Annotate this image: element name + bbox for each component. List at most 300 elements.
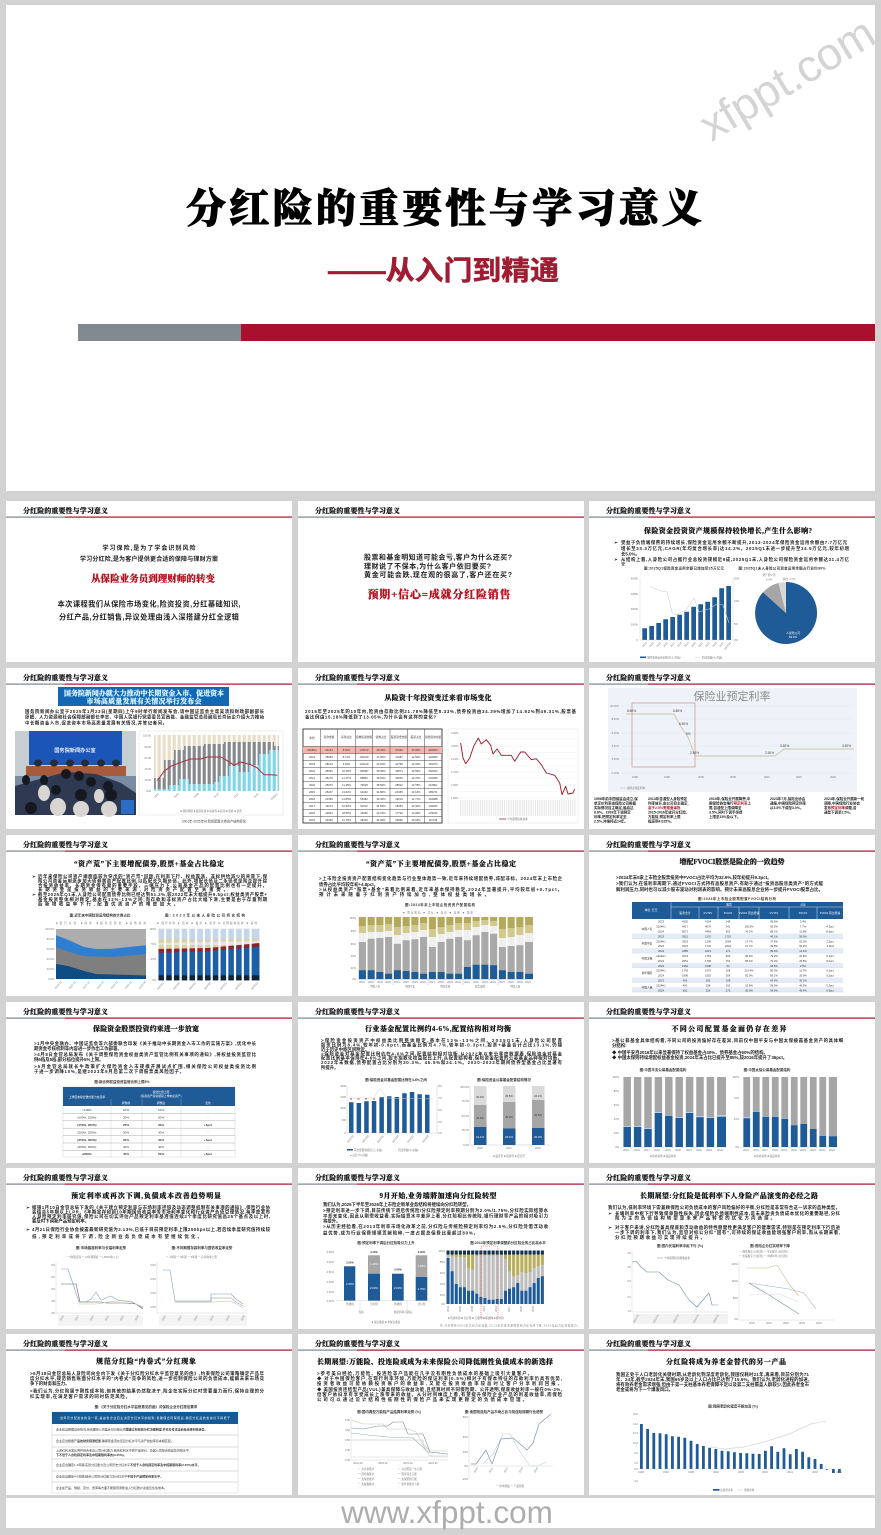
stacked bars: CPIC: 2016 [753,1148,759,1152]
line chart: bond yield: 3.90% [451,731,459,735]
data table: 24363 [325,797,333,801]
line chart: benchmark rates: 2017 [74,1314,80,1322]
bullets: 据银1月10日金管总局下发的《关于建立预定利率与市场利率挂钩及动态调整机制有关事项的通知》,保险行业协 [32,1204,271,1211]
FVOCI table: 2024H1 [656,939,666,943]
stacked bar and line chart: 2005 [173,791,180,799]
line chart: insurance predetermined interest rate [608,688,857,792]
panel: slide 2 learning purpose [6,501,292,662]
data table: 12.30% [411,804,421,808]
line chart: long-term rate: 3.0 [627,1265,632,1269]
data table: 178472 [360,748,369,752]
bar chart: funds balance: 2022 [704,641,711,648]
regulation table: 30% [158,1123,164,1127]
legend: ■ 固定收益 ■ 非标 ■ 权益 ■ 其他 ■ 现金 [403,910,473,914]
body text: 例6档及5档,部分档位提升5%上限。 [34,1056,104,1063]
body text [321,1037,563,1071]
FVOCI table: 2023 [658,920,664,924]
stacked bars: product mix: 注:分红险在2002年之前占比较低,2013年后受普通险影响占比有所下降,2024年起占比持续提升。 [440,1324,580,1328]
stacked bars: Ping An: 40% [614,1117,620,1121]
bar chart: fund allocation: 1800 [340,1084,347,1088]
timeline notes: 2013年普通型人身险预定 [648,796,688,801]
line chart: benchmark rates: 2021 [104,1314,110,1322]
body text: >2024年末5家上市险企股票投资中FVOCI占比平均为32.9%,较年初提升9.3pct。 [616,874,772,881]
data table: 262044 [429,769,438,773]
data table: 债券投资金额 [356,735,372,739]
FVOCI table: 148 [726,920,731,924]
stacked bars: CPIC: 2021 [800,1148,806,1152]
requirements table: 企业应当确定4-5年期,结合公司的分红能力及分红水平不低于产品预定利率水平。 [56,1474,163,1478]
regulation table: [300%, 350%) [78,1145,96,1149]
legends [66,1255,217,1259]
stacked bars: product mix: 2017 [507,1305,511,1312]
questions: 理财说了不保本,为什么客户依旧要买? [364,562,491,570]
line chart: universal products: 2.00 [345,1458,351,1462]
stacked bars: fund structure: ■ 股票型 ■ 债券型 ■ 混合型 [493,1154,525,1158]
regulation table: [100%, 150%) [78,1116,96,1120]
body text: 2022年末数据,债券配置占比分别为30.3%、45.5%和24.1%。2020-2022年期间债券型基金占比显著有 [321,1059,563,1066]
data table: 2019 [309,790,315,794]
line chart: US VUL share [462,1414,553,1488]
pie chart [755,573,817,644]
regulation table: +5pct [204,1138,212,1142]
FVOCI table: 11.9% [799,930,807,934]
chart titles: 图:国内长端利率中枢下行 (%) [657,1243,703,1248]
FVOCI table: 1806 [682,974,688,978]
requirements table [52,1412,238,1493]
stacked bars: holdings: 2023Q3 [172,981,181,991]
bullets: ➢ [614,540,618,545]
FVOCI table: 2921 [682,934,688,938]
data table: 34.59% [376,804,386,808]
body text: 公司可以通过设计结构性低刚性的保险产品来实现更稳定的负债成本管理。 [317,1396,527,1403]
stacked bars: Ping An: 60% [614,1103,620,1107]
header: 分红险的重要性与学习意义 [23,1173,108,1182]
regulation table: 50% [158,1152,164,1156]
data table: 2020 [309,783,315,787]
stacked bars: product mix: 2023 [531,1305,535,1312]
chart title: 图:2024年末上市险企投资资产配置结构 [405,902,476,907]
stacked bars: product mix: 2014 [494,1305,498,1312]
line chart: universal products: 2021-01 [353,1461,363,1465]
stacked bar and line chart: 2013 [213,791,220,799]
line chart: deposit rates: 4.0% [150,1291,157,1295]
questions [364,552,512,579]
data table: 34.39% [376,818,386,822]
stacked bar and line chart: 100.00 [143,734,152,738]
bar chart: rates: 1.40% [370,1262,378,1266]
FVOCI table: 1743 [682,969,688,973]
FVOCI table: 3.5% [800,964,807,968]
bar chart: rates: 3.40% [370,1250,378,1254]
area chart: asset mix: 0.0% [48,977,55,981]
body text: ◆ 美国投资连结型产品(VUL)兼具保障与收益功能,且结算时间不同保险期、公开透明,保底收益利率一般在0%-2%, [317,1386,562,1393]
bar chart: funds balance: 2020 [690,641,697,648]
area chart: asset mix: 100.0% [45,927,55,931]
bar chart: funds balance: 0 [637,638,639,642]
data table: 11.27% [342,776,352,780]
stacked bars: fund structure: 30.3% [534,1135,542,1139]
bullets [614,539,850,568]
line chart: realised dividend rate: 2024 [816,1321,822,1325]
bar chart: fund allocation: 600 [342,1118,347,1122]
stacked bars: fund structure: 24.1% [534,1094,542,1098]
line chart: insurance predetermined interest rate: 3.50% [780,744,789,748]
FVOCI table: 40.5% [799,983,807,987]
body text [30,1370,265,1400]
bar chart: rates: 2.50% [346,1282,354,1286]
stacked bars: CPIC: 2015 [743,1148,749,1152]
panel: slide 3 why buy [298,501,584,662]
data table: 133910 [429,811,438,815]
bar chart: funds balance: 2023 [711,641,718,648]
table title: 图:新比例权益投资监管比例上限5% [94,1079,150,1084]
panel: slide 8 asset shortage bonds [6,835,292,996]
header: 分红险的重要性与学习意义 [23,840,108,849]
bar and line chart: aging: 10.0 [633,1441,639,1445]
regulation table: 40% [123,1145,129,1149]
FVOCI table: 1742 [705,944,711,948]
stacked bar chart: 2023 [412,980,418,984]
bar and line chart: aging: 2018 [812,1470,818,1474]
stacked bars: product mix: 2002 [446,1305,450,1312]
stacked bars: product mix: 100% [438,1249,446,1253]
stacked bars: fund structure: 46.6% [476,1116,484,1120]
line chart: long-term rate: 1.5 [627,1309,632,1313]
bullets: 险为主的负债结构转型是未来产品转型的优化方向选择。 [615,1214,775,1222]
bar and line chart: aging: 老龄化率 [744,1488,755,1492]
line chart: deposit rates: 3.0% [150,1305,157,1309]
bar and line chart: aging: -4.0 [634,1479,639,1483]
FVOCI table: FVOCI [724,911,732,915]
stacked bar chart: 2024 [455,980,461,984]
data table: 39.99% [376,769,386,773]
text block: 分红产品,分红销售,异议处理由浅入深搭建分红全逻辑 [59,612,239,622]
data table: 49.31% [376,748,386,752]
bullets: 分红险预期收益可实现持续提升。 [615,1234,705,1241]
stacked bars: product mix: 0% [441,1302,446,1306]
bar chart: fund allocation: 3% [438,1120,442,1124]
stacked bars: Ping An: ■ 债券基金 ■ 权益基金 [650,1154,676,1158]
chart titles: 图:近年来中国险资运用结构的大类占比 [70,912,131,918]
stacked bar chart: 中国人保 [510,984,521,988]
body text: 老金或将为下一个爆发风口。 [616,1386,673,1393]
body text: >5月金管总局就长牛政策扩大保险资金入市规模开展试点扩围,相关保险公司权益类投资比例 [34,1063,257,1070]
FVOCI table: 中国人寿 [642,927,653,931]
line chart: long-term rate: 2024-01 [692,1313,700,1324]
stacked bars: Ping An: 20% [614,1131,620,1135]
bar chart: funds balance: 0% [734,638,738,642]
FVOCI table: 460 [726,954,731,958]
data table: 存款金额 [324,735,335,739]
stacked bar chart [349,916,533,988]
bullets: 元 [621,562,626,568]
table title: 图:2024年上市险企股票配置FVOCI结构分析 [698,896,776,901]
heading: 行业基金配置比例约4-6%,配置结构相对均衡 [365,1024,511,1033]
stacked bars: CPIC [732,1075,837,1158]
line chart: insurance predetermined interest rate: 2.50% [690,751,699,755]
timeline notes: 调降,中国保险行业协会 [824,800,860,806]
FVOCI table: 9.0pct [826,959,834,963]
data table: 41587 [395,755,403,759]
bar chart: rates [327,1250,430,1324]
header: 分红险的重要性与学习意义 [606,840,691,849]
bar chart: fund allocation: 2023Q1 [376,1134,385,1144]
FVOCI table: 1790 [705,959,711,963]
bar chart: fund allocation: ● 占比 (%,右轴) [350,1153,368,1157]
questions: 黄金可能会跌,现在观的很高了,客户还在买? [364,570,512,579]
stacked bars: holdings: 40% [151,957,157,961]
chart titles [357,1409,544,1414]
FVOCI table: 5.3pct [826,983,834,987]
bar chart: fund allocation: 1000 [340,1106,347,1110]
timeline notes: 2.5%,并维持近14年。 [594,818,628,824]
body text: 国务院新闻办公室于2025年1月23日(星期四)上午9时举行新闻发布会,请中国证监会主席吴清和财政部副部长 [25,708,265,715]
stacked bars: CPIC: 2022 [810,1148,816,1152]
line chart: benchmark rates: 2015 [59,1314,65,1322]
data table: 12.34% [411,762,421,766]
stacked bars: fund structure: 25.5% [505,1094,513,1098]
body text: ◆ 对于中国保险客户,在现行利率环境,万能险的保证利率(0.5%)相对于有保本特征的存款利率仍具有优势, [317,1375,562,1382]
FVOCI table: 59.5% [770,983,778,987]
panel: slide 5 press conference [6,668,292,829]
bullets: 对于客户来讲,分红险兼具保底和浮动收益的特性稳健性更满足客户的健康需求,特别是在预定利率下行后进 [615,1224,841,1231]
timeline notes: 单定价利率由保险公司根据 [594,800,636,806]
body text: 争下的财务和压力。 [30,1380,70,1387]
line chart: deposit rates [150,1262,247,1326]
requirements table: 下不低于人身险预定利率及中短期限利率的(3.25%)。 [56,1452,127,1457]
bar chart: rates: 3.40% [418,1250,426,1254]
regulation table: [250%, 300%) [77,1138,97,1142]
stacked bars: fund structure: 2021 [506,1146,512,1150]
stacked bar chart: 80% [351,929,357,933]
stacked bar chart: 20% [351,966,357,970]
stacked bars: CPIC: 40% [734,1117,740,1121]
stacked bar and line chart: 60.00 [144,756,152,760]
FVOCI table: 168 [726,969,731,973]
chart caption: 2001年-2025年H1险资配置大类资产结构变化 [182,818,247,824]
blue title banner [58,687,229,706]
heading: 分红险将成为养老金替代的另一产品 [666,1357,786,1366]
header: 分红险的重要性与学习意义 [606,1339,691,1348]
chart titles [657,1243,790,1248]
FVOCI table: 602 [683,988,688,992]
bar and line chart: aging: 2024 [836,1470,842,1474]
bullets: ➢ [32,874,36,879]
regulation table: 权益比例上限 [153,1090,170,1094]
stacked bars: Ping An: 2022 [696,1148,702,1152]
line chart: deposit rates: 2021 [209,1314,215,1322]
decorative bar [78,324,875,341]
body text: >参考美日经验,万能险、投连险等产品能在几乎没有刚性负债成本的基础上吸引大量客户。 [317,1370,532,1377]
FVOCI table: 85.6% [770,949,778,953]
FVOCI table: 2068 [725,939,731,943]
legends: 一 1年期 一 3年期 一 5年期 一 存款利率上限 [166,1255,217,1259]
line chart: realised dividend rate: 50% [733,1296,739,1300]
data table: 年份 [309,736,315,740]
heading: 长期展望:分红险是低利率下人身险产品演变的必经之路 [640,1191,818,1200]
data table: 13.62% [342,790,352,794]
header: 分红险的重要性与学习意义 [315,1173,400,1182]
line chart: universal products: 一 国寿鑫账户 [358,1472,375,1476]
line chart: long-term rate: 3.5 [627,1251,632,1255]
FVOCI table: 39.8% [770,944,778,948]
line chart: deposit rates: 2025 [240,1314,246,1322]
stacked bar chart: 2023 [447,980,453,984]
FVOCI table: 7.7% [800,925,807,929]
timeline notes: 从3.5%下调至3.0%。 [770,805,803,810]
line chart: universal products: 一 太保鑫账户 [358,1482,375,1486]
FVOCI table: 2024H1 [656,954,666,958]
data table: 47.66% [376,755,386,759]
line chart: realised dividend rate: 120% [731,1262,739,1266]
header: 分红险的重要性与学习意义 [23,673,108,682]
chart titles: 图:2023年以来人身险公司持仓结构 [165,912,246,918]
data table: 164088 [429,797,438,801]
regulation table: 调整后 [157,1101,165,1105]
FVOCI table: 1753 [705,954,711,958]
bullets: ➢ [26,1205,30,1210]
stacked bar and line chart [139,731,283,815]
chart titles [70,912,246,918]
timeline notes: 利率放开,由公司自主确定, [648,800,688,806]
stacked bar chart: 中国人寿 [370,984,381,988]
bar chart: funds balance: 2024 [718,641,725,648]
regulation table: - [208,1108,209,1112]
data table: 34790 [395,762,403,766]
data table: 38446 [360,818,368,822]
panel: slide 10 FVOCI table [589,835,875,996]
panel: slide 12 industry fund allocation [298,1002,584,1163]
line chart: bond yield [448,729,578,823]
timeline notes: 提高到4.025%。 [648,818,674,824]
header: 分红险的重要性与学习意义 [606,1007,691,1016]
requirements table: 当年可分配盈余的第一项,是由各企业自主决定分红水平的权利,但确保合同保障后,确定分红后的盈余仍不得低于 [60,1416,230,1420]
FVOCI table: 2023 [658,978,664,982]
panel: slide 7 predetermined rate [589,668,875,829]
body text: >我们认为,分红险属于刚性成本险,但其他的结果仍然取决于,险企在实际分红时需要量力而行,保持合理的分 [30,1388,265,1394]
area chart: asset mix: 2021-12 [110,980,119,990]
stacked bar chart: 2024 [385,980,391,984]
timeline notes: 发布预定利率调整,普 [824,805,857,810]
FVOCI table: 1613 [705,949,711,953]
FVOCI table: 60.2% [799,944,807,948]
chart titles: 图:2025Q1末人身险公司资金运用余额占行业约90% [738,566,826,570]
stacked bar and line chart: 2009 [193,791,200,799]
bullets: 一步下调的利率下,我们认为,监管对标公分红“固有”,可持续的保证收益能增强客户利率,而从长期来看, [615,1229,840,1236]
regulation table: [150%, 200%) [77,1123,97,1127]
data table: 28179 [325,776,333,780]
panel: slide 15 accelerate to dividend [298,1168,584,1329]
body text: 金比例由15.18%降低到了13.05%,为什么会有这样的变化? [305,714,436,720]
legends: 一 5年期定存 一 10年期国债 一 LPR(5年以上) [66,1255,119,1259]
text block [58,544,240,622]
line chart: long-term rate [627,1251,728,1324]
stacked bars: product mix: 2011 [482,1305,486,1312]
line chart: long-term rate: 2022-01 [652,1313,660,1324]
FVOCI table: 4076 [705,925,711,929]
data table: 11.71% [412,797,421,801]
body text: 红实现率,在满足客户需求的同时防范风险。 [30,1393,130,1400]
heading: 长期展望:万能险、投连险或成为未来保险公司降低刚性负债成本的新选择 [317,1357,553,1366]
FVOCI table: 90.3% [770,969,778,973]
stacked bar and line chart: 80.00 [144,745,152,749]
data table: 56382 [360,797,368,801]
stacked bars: product mix [438,1246,580,1328]
line chart: deposit rates: 2015 [161,1314,167,1322]
bar chart: funds balance: 20000 [631,607,639,611]
body text: >从历史经验看,在2013年利率市场化改革之前,分红险与传统险预定利率均为2.5%,分红险凭借浮动收 [323,1223,549,1230]
data table: 332680 [429,755,438,759]
FVOCI table: 450 [683,983,688,987]
bar chart: funds balance: 2025Q1 [723,641,732,651]
regulation table: 10% [158,1108,164,1112]
legends [56,921,257,925]
stacked bars: holdings: 100% [149,927,157,931]
body text: 廖岷、人力资源和社会保障部副部长李忠、中国人民银行党委委员宣昌能、金融监管总局副局长肖远企介绍大力推动 [25,714,265,720]
bar chart: funds balance: 2016 [662,641,669,648]
stacked bar chart: 2021 [359,980,365,984]
regulation table: [200%, 250%) [78,1130,96,1134]
timeline notes: 实际情况自主确定,最高达 [594,805,634,810]
header: 分红险的重要性与学习意义 [606,673,691,682]
FVOCI table: 2024 [658,930,664,934]
stacked bar chart: 40% [351,954,357,958]
panel: slide 4 insurance funds scale [589,501,875,662]
body text: >从权益类资产“股票+基金”来看比例来看,近年来基本保持稳定,2024年显著提升,平均较年初+0.7pct。 [319,886,562,893]
area chart: asset mix: 2025-03 [138,980,147,990]
bar and line chart: aging: 0.0 [634,1467,639,1471]
FVOCI table: 2024 [658,988,664,992]
table title: 图:《关于分红险分红水平监管意见的函》对保险企业分红提出要求 [95,1404,198,1409]
red callout: 从保险业务员到理财师的转变 [91,573,215,585]
line chart: bond yield: 1.90% [451,796,459,800]
FVOCI table: 2213 [682,954,688,958]
chart titles: 图:国内典型万能险产品结算利率走势 (%) [357,1409,421,1414]
body text: ◆ 中国太保则持续增配权益基金投资,2024年末占比已提升至85%,较2016年提升了36pct。 [612,1054,787,1061]
bar chart: rates: 0.00% [327,1299,335,1303]
line chart: US VUL share: 2016 [518,1466,524,1474]
heading: 增配FVOCI股票是险企的一致趋势 [680,857,784,866]
body text: >我们认为,在低利率周期下,通过FVOCI方式持有高股息资产,有助于通过“投资高股息类资产”的方式缓 [616,880,824,887]
bar chart: rates: 预定利率下调后 [394,1310,412,1314]
body text: >上市险企投资资产配置结构变化趋势与行业整体趋势一致,近年来持续增配债券,减配非标。2024年末上市险企 [319,875,563,882]
stacked bars: CPIC: 2017 [762,1148,768,1152]
regulation table: 变化 [205,1101,211,1105]
bar chart: funds balance: 25% [734,576,740,580]
chart titles: 图:市场基准利率与长端利率走势 [76,1245,127,1250]
body text: 我国正处于人口老龄化关键时期,从老龄化到深度老龄化,我国仅耗时21年,再来看,目前分别为71 [616,1371,810,1378]
line chart: insurance predetermined interest rate: 2.50% [765,751,774,755]
timeline notes: 限,普通型上限调降至 [709,805,742,810]
stacked bars: fund structure: 2022 [535,1146,541,1150]
regulation table: 30% [158,1130,164,1134]
data table: 13.28% [411,811,421,815]
legends: ■ 银行存款 ■ 债券 ■ 股票 ■ 基金 ■ 长期股权投资 ■ 其他 [157,921,257,925]
body text: >6月18日金管总局人身险司向业内下发《关于分红险分红水平监管意见的函》,约束保险公司策略确定产品年 [30,1370,265,1377]
stacked bars: Ping An: 0% [615,1145,620,1149]
stacked bars: holdings: 2025Q1 [219,981,228,991]
FVOCI table: 82.0% [745,974,753,978]
line chart: universal products: 一 平安聚富一生万能 [398,1467,422,1471]
bullets [32,873,268,908]
stacked bar and line chart: 40.00 [144,767,152,771]
bar and line chart: aging: 1990 [638,1470,644,1474]
stacked bar chart: 2024 [525,980,531,984]
line chart: universal products: 一 国寿瑞安万能 [398,1472,417,1476]
chart titles: 图:各险企分红实现率下降 [750,1243,790,1248]
FVOCI table: 4.3pct [826,925,834,929]
bar and line chart: aging: 2014 [787,1470,793,1474]
